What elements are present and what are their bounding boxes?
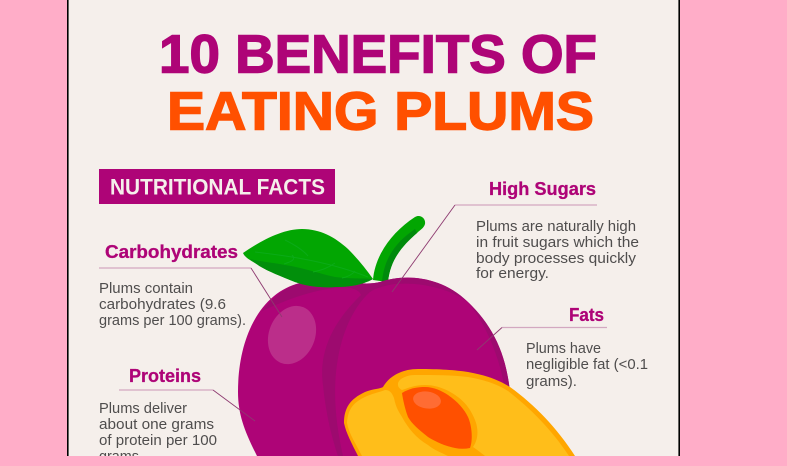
plum leaf xyxy=(243,229,373,287)
callout: proteins: Plums deliver xyxy=(99,401,187,417)
callout: carbohydrates: Plums contain xyxy=(99,281,193,297)
callout: high sugars xyxy=(392,178,639,292)
callout: fats: grams). xyxy=(526,374,577,390)
plum seed xyxy=(402,387,472,449)
title: EATING PLUMS xyxy=(167,82,594,142)
callout: carbohydrates: grams per 100 grams). xyxy=(99,313,246,329)
plum highlight xyxy=(259,299,325,371)
callout: carbohydrates xyxy=(99,241,282,329)
plum top rim shading xyxy=(262,278,468,311)
flesh right lobe xyxy=(398,375,569,456)
section heading: nutritional facts: NUTRITIONAL FACTS xyxy=(110,174,325,200)
background panel xyxy=(68,0,679,466)
callout: carbohydrates: Carbohydrates xyxy=(105,241,238,262)
callout: proteins xyxy=(99,365,255,465)
callout: proteins: of protein per 100 xyxy=(99,433,217,449)
title xyxy=(159,24,597,142)
callout: high sugars: for energy. xyxy=(476,266,549,282)
callout: high sugars: body processes quickly xyxy=(476,251,637,267)
plum right edge shading xyxy=(468,302,511,410)
illustration: plum xyxy=(238,216,575,456)
plum crease shading xyxy=(322,292,370,456)
callout: fats: Fats xyxy=(569,304,604,325)
callout: proteins: about one grams xyxy=(99,417,214,433)
callout: carbohydrates: carbohydrates (9.6 xyxy=(99,297,226,313)
callout: fats: Plums have xyxy=(526,341,601,357)
callout: fats: negligible fat (<0.1 xyxy=(526,357,648,373)
callout: high sugars: in fruit sugars which the xyxy=(476,235,639,251)
callout: proteins: grams. xyxy=(99,449,143,465)
plum stem xyxy=(373,216,425,282)
title: 10 BENEFITS OF xyxy=(159,24,597,84)
bottom pink band xyxy=(0,456,787,466)
plum half flesh xyxy=(344,369,575,456)
plum body xyxy=(238,278,511,456)
callout: fats xyxy=(477,304,648,390)
flesh left lobe xyxy=(347,390,448,456)
section heading: nutritional facts xyxy=(99,169,335,204)
callout: high sugars: Plums are naturally high xyxy=(476,219,636,235)
seed highlight xyxy=(412,390,442,410)
callout: proteins: Proteins xyxy=(129,365,201,386)
callout: high sugars: High Sugars xyxy=(489,178,596,199)
